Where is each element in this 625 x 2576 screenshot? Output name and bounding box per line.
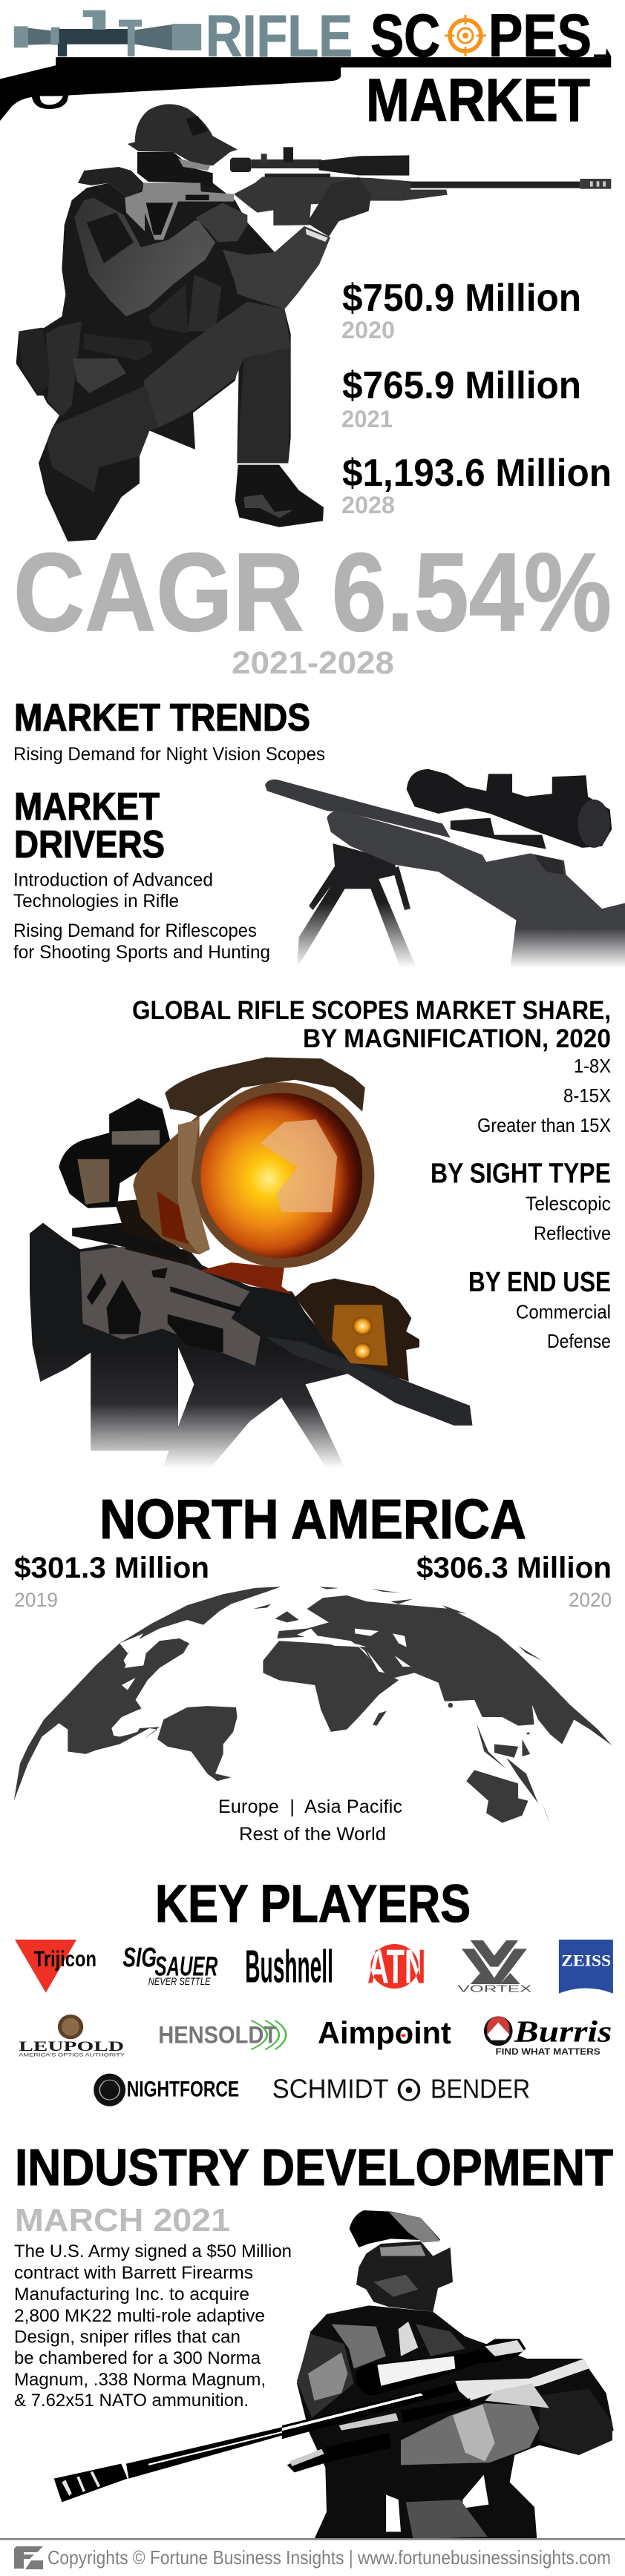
industry development text: contract with Barrett Firearms xyxy=(14,2263,253,2283)
logo: Aimpoint xyxy=(318,2016,451,2050)
stat: 2020: 2020 xyxy=(569,1589,612,1611)
market drivers block: DRIVERS xyxy=(14,823,165,866)
logo: Leupold: AMERICA'S OPTICS AUTHORITY xyxy=(19,2052,125,2058)
industry development text: 2,800 MK22 multi-role adaptive xyxy=(14,2306,265,2326)
logo: Nightforce xyxy=(94,2074,239,2106)
key players heading: KEY PLAYERS xyxy=(155,1875,471,1934)
stat: 2028 market size: $1,193.6 Million xyxy=(342,452,612,495)
footer xyxy=(0,2538,625,2569)
key players logos: ATN xyxy=(367,1940,426,1993)
thermal rifle scope photo xyxy=(30,1057,472,1469)
industry development text: be chambered for a 300 Norma xyxy=(14,2348,261,2368)
market trends block: Rising Demand for Night Vision Scopes xyxy=(13,744,325,765)
market trends block xyxy=(13,696,325,765)
market drivers block: Technologies in Rifle xyxy=(13,891,179,912)
market drivers block: Rising Demand for Riflescopes xyxy=(13,920,257,941)
end use segments xyxy=(468,1267,611,1352)
stat: 2021 market size: 2021 xyxy=(341,406,393,432)
key players logos: SAUER xyxy=(154,1951,217,1982)
stat: 2028 market size xyxy=(341,452,612,518)
magnification segments xyxy=(477,1055,611,1136)
logo: Trijicon xyxy=(15,1940,96,1993)
logo: ATN xyxy=(368,1944,424,1989)
stat: 2020 xyxy=(416,1552,612,1611)
title word SCOPES: PES xyxy=(488,2,592,70)
title word MARKET: MARKET xyxy=(366,67,590,134)
end use segments: Commercial xyxy=(516,1301,611,1323)
stat: 2020 market size xyxy=(341,277,581,343)
stat: 2019: $301.3 Million xyxy=(14,1552,209,1584)
stat: 2021 market size: $765.9 Million xyxy=(342,364,581,407)
sight type segments xyxy=(431,1159,611,1245)
soldier holding sniper rifle photo xyxy=(282,2210,614,2539)
magnification segments: 1-8X xyxy=(574,1055,611,1077)
stat: 2028 market size: 2028 xyxy=(341,492,395,518)
logo: Schmidt Bender: BENDER xyxy=(431,2075,530,2104)
logo: Hensoldt xyxy=(158,2020,286,2049)
sight type segments: Reflective xyxy=(534,1222,611,1245)
market drivers block xyxy=(13,785,270,963)
market drivers block: MARKET xyxy=(14,785,160,829)
logo: Sig Sauer: SIG xyxy=(122,1943,157,1973)
logo: Vortex xyxy=(457,1940,531,1994)
other regions: Europe | Asia Pacific xyxy=(218,1796,402,1817)
end use segments: Defense xyxy=(547,1330,611,1352)
logo: Trijicon: Trijicon xyxy=(34,1947,96,1971)
industry development text: MARCH 2021 xyxy=(15,2202,230,2239)
title word SCOPES xyxy=(370,2,592,70)
key players logos: Bushnell xyxy=(245,1941,333,1992)
logo: Schmidt Bender: SCHMIDT xyxy=(272,2075,389,2104)
icon: fortune business insights logo xyxy=(14,2546,43,2569)
scope illustration xyxy=(14,10,201,56)
stat: 2020: $306.3 Million xyxy=(416,1552,612,1584)
market share heading xyxy=(132,996,611,1053)
market drivers block: for Shooting Sports and Hunting xyxy=(13,942,270,963)
stat: 2021 market size xyxy=(341,364,581,432)
market share heading: BY MAGNIFICATION, 2020 xyxy=(303,1024,611,1053)
soldier aiming rifle photo xyxy=(16,104,611,541)
sniper rifle barrel and muzzle brake xyxy=(54,2417,327,2502)
industry development text: Design, sniper rifles that can xyxy=(14,2328,240,2347)
title word SCOPES: SC xyxy=(370,2,440,70)
industry development text: Manufacturing Inc. to acquire xyxy=(14,2285,249,2305)
logo: Aimpoint: Aimpoint xyxy=(318,2016,451,2050)
logo: Zeiss xyxy=(559,1940,613,1994)
logo: Hensoldt: HENSOLDT xyxy=(158,2022,277,2049)
world map xyxy=(14,1587,612,1827)
magnification segments: Greater than 15X xyxy=(477,1114,611,1136)
other regions xyxy=(218,1796,402,1845)
logo: Burris xyxy=(484,2015,612,2057)
stat: 2019 xyxy=(14,1552,209,1611)
logo: Vortex: VORTEX xyxy=(457,1983,531,1994)
key players logos: ATN xyxy=(367,1940,426,1993)
market drivers block: Introduction of Advanced xyxy=(13,869,213,890)
logo: Sig Sauer xyxy=(122,1943,217,1987)
industry development text xyxy=(14,2202,292,2411)
title word RIFLE: RIFLE xyxy=(206,3,353,69)
stat: 2019: 2019 xyxy=(14,1589,58,1611)
logo: Leupold: LEUPOLD xyxy=(19,2038,124,2054)
magnification segments: 8-15X xyxy=(563,1084,611,1107)
key players logos xyxy=(15,1940,613,2106)
icon: orange target xyxy=(445,15,486,56)
logo: Leupold xyxy=(19,2015,125,2058)
rifle on bipod photo xyxy=(265,769,625,969)
stat: 2020 market size: 2020 xyxy=(341,317,395,343)
industry development text: Magnum, .338 Norma Magnum, xyxy=(14,2370,266,2390)
stat: 2020 market size: $750.9 Million xyxy=(342,277,581,320)
other regions: Rest of the World xyxy=(239,1824,386,1845)
key players logos: NIGHTFORCE xyxy=(127,2077,239,2101)
north america heading: NORTH AMERICA xyxy=(99,1488,526,1550)
rifle silhouette xyxy=(0,48,611,121)
logo: Sig Sauer: NEVER SETTLE xyxy=(148,1975,211,1987)
industry development text: & 7.62x51 NATO ammunition. xyxy=(14,2391,249,2411)
header: rifle scopes market title xyxy=(0,2,611,134)
CAGR heading: 2021-2028 xyxy=(232,645,394,681)
sight type segments: Telescopic xyxy=(526,1193,611,1215)
market trends block: MARKET TRENDS xyxy=(14,696,310,739)
industry development text: The U.S. Army signed a $50 Million xyxy=(14,2241,292,2262)
